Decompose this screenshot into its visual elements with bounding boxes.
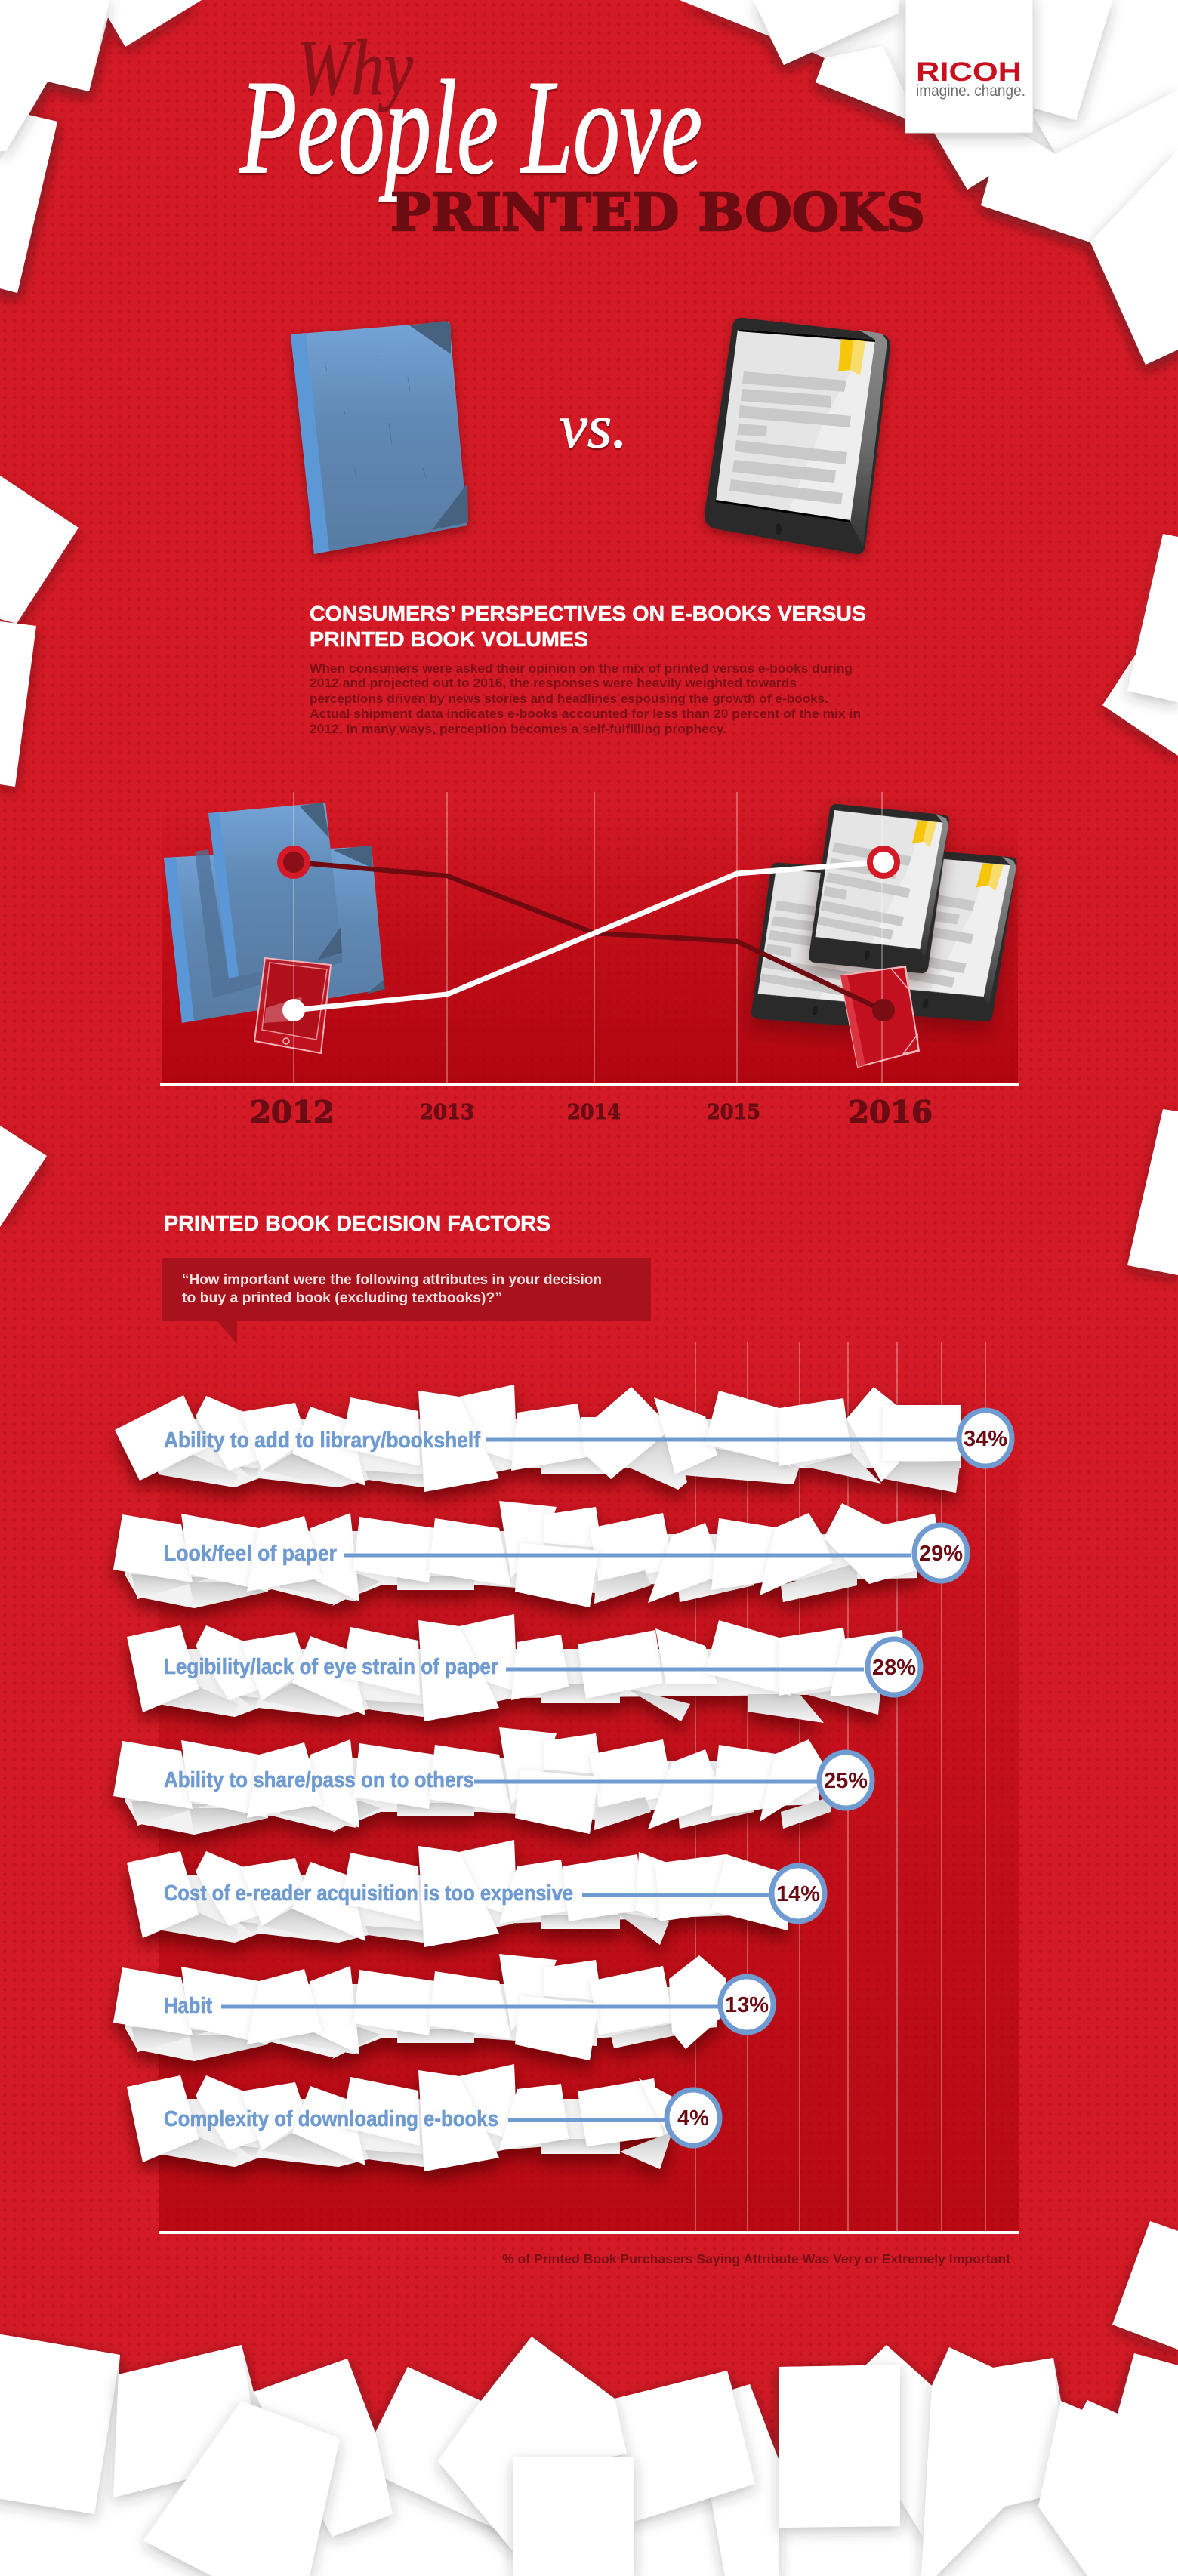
- year labels: 2012: [250, 1095, 335, 1130]
- value: [667, 2090, 720, 2146]
- value: 28%: [872, 1656, 916, 1680]
- x axis: [160, 1083, 1019, 1086]
- row: Habit 13%: [113, 1954, 773, 2061]
- axis caption: % of Printed Book Purchasers Saying Attribute Was Very or Extremely Important: [502, 2251, 1010, 2266]
- leader line: [508, 2118, 666, 2122]
- year labels: 2015: [707, 1101, 760, 1124]
- heading: consumers' perspectives: [310, 602, 866, 651]
- chart backdrop: [162, 793, 1018, 1084]
- heading: decision factors: PRINTED BOOK DECISION FACTORS: [164, 1212, 550, 1236]
- Ricoh logo tag: [905, 0, 1033, 133]
- icon: e-readers 2016: [751, 803, 1018, 1028]
- icon: stacked printed books 2012: [164, 803, 385, 1023]
- label: Ability to add to library/bookshelf: [164, 1428, 480, 1453]
- year labels: [250, 1095, 933, 1130]
- vs. label: vs.: [560, 392, 628, 461]
- marker: e-book 2016: [870, 849, 897, 876]
- paper strip: [127, 1614, 905, 1723]
- row: Ability to add to library/bookshelf 34%: [115, 1385, 1012, 1493]
- year labels: 2014: [567, 1101, 621, 1124]
- icon: e-reader: [705, 318, 890, 554]
- paper pile: left edge sheets: [0, 476, 79, 1227]
- leader line: [221, 2005, 718, 2008]
- paper pile: bottom: [0, 2333, 1178, 2576]
- paper pile: top left corner: [0, 0, 202, 293]
- icon: small red book 2016: [840, 966, 919, 1067]
- Ricoh logo tag: imagine. change.: [916, 82, 1025, 100]
- callout: survey question: “How important were the following attributes in your decision: [182, 1272, 602, 1288]
- intro paragraph: When consumers were asked their opinion on the mix of printed versus e-books during: [310, 661, 853, 676]
- label: Complexity of downloading e-books: [164, 2107, 498, 2131]
- row: Ability to share/pass on to others 25%: [113, 1727, 872, 1835]
- callout: survey question: [162, 1258, 651, 1344]
- value: 25%: [824, 1769, 868, 1793]
- label: Legibility/lack of eye strain of paper: [164, 1655, 498, 1679]
- Ricoh logo tag: RICOH: [916, 57, 1022, 87]
- row: Look/feel of paper 29%: [113, 1501, 967, 1608]
- paper strip: [127, 1840, 788, 1947]
- value: 29%: [919, 1542, 963, 1566]
- leader line: [344, 1554, 911, 1557]
- paper strip: [113, 1501, 942, 1608]
- e-book line (white, rising): [294, 862, 881, 1010]
- paper strip: [113, 1954, 726, 2061]
- intro paragraph: Actual shipment data indicates e-books accounted for less than 20 percent of the mix in: [310, 707, 861, 721]
- value: [959, 1410, 1012, 1466]
- year gridlines: [294, 792, 882, 1083]
- leader line: [474, 1780, 818, 1783]
- value: [772, 1866, 825, 1921]
- line chart: printed vs e-books 2012-2016: [160, 792, 1019, 1130]
- leader line: [486, 1437, 957, 1442]
- value: 34%: [964, 1427, 1007, 1451]
- label: Habit: [164, 1994, 212, 2018]
- marker: printed 2016: [872, 999, 895, 1021]
- value: [819, 1752, 872, 1808]
- title: PRINTED BOOKS: [390, 183, 925, 243]
- leader line: [582, 1893, 769, 1897]
- value: [720, 1977, 773, 2032]
- label: Look/feel of paper: [164, 1542, 337, 1566]
- paper strip: [113, 1727, 831, 1835]
- value: 13%: [725, 1993, 769, 2017]
- marker: printed 2012: [280, 849, 307, 876]
- printed book line (dark, declining): [294, 862, 883, 1010]
- bar chart axis: [159, 2231, 1019, 2234]
- title: [239, 23, 925, 243]
- title: People Love: [239, 52, 702, 202]
- row: Cost of e-reader acquisition is too expensive 14%: [127, 1840, 825, 1947]
- icon: printed book: [291, 321, 468, 554]
- intro paragraph: 2012. In many ways, perception becomes a self-fulfilling prophecy.: [310, 722, 726, 736]
- intro paragraph: [310, 661, 861, 736]
- value: [914, 1525, 967, 1581]
- label: Cost of e-reader acquisition is too expensive: [164, 1881, 573, 1906]
- heading: consumers' perspectives: CONSUMERS’ PERSPECTIVES ON E-BOOKS VERSUS: [310, 602, 866, 625]
- callout: survey question: to buy a printed book (excluding textbooks)?”: [182, 1290, 502, 1306]
- intro paragraph: 2012 and projected out to 2016, the responses were heavily weighted towards: [310, 676, 797, 690]
- intro paragraph: perceptions driven by news stories and headlines espousing the growth of e-books.: [310, 692, 828, 706]
- row: Complexity of downloading e-books 4%: [127, 2064, 720, 2171]
- bar chart backdrop and scale: [159, 1342, 1019, 2232]
- leader line: [506, 1667, 864, 1672]
- paper pile: top right corner: [680, 0, 1178, 365]
- year labels: 2016: [848, 1095, 933, 1130]
- marker: e-book 2012: [282, 999, 305, 1021]
- icon: small red e-reader 2012: [254, 958, 331, 1053]
- row: Legibility/lack of eye strain of paper 28%: [127, 1614, 921, 1723]
- value: [868, 1639, 921, 1695]
- paper strip: [115, 1385, 961, 1493]
- paper strip: [127, 2064, 675, 2171]
- title: Why: [297, 23, 414, 112]
- paper pile: right edge sheets: [1102, 534, 1178, 2350]
- year labels: 2013: [420, 1101, 474, 1124]
- label: Ability to share/pass on to others: [164, 1768, 474, 1792]
- heading: consumers' perspectives: PRINTED BOOK VOLUMES: [310, 627, 588, 651]
- value: 14%: [776, 1882, 820, 1906]
- value: 4%: [677, 2106, 709, 2131]
